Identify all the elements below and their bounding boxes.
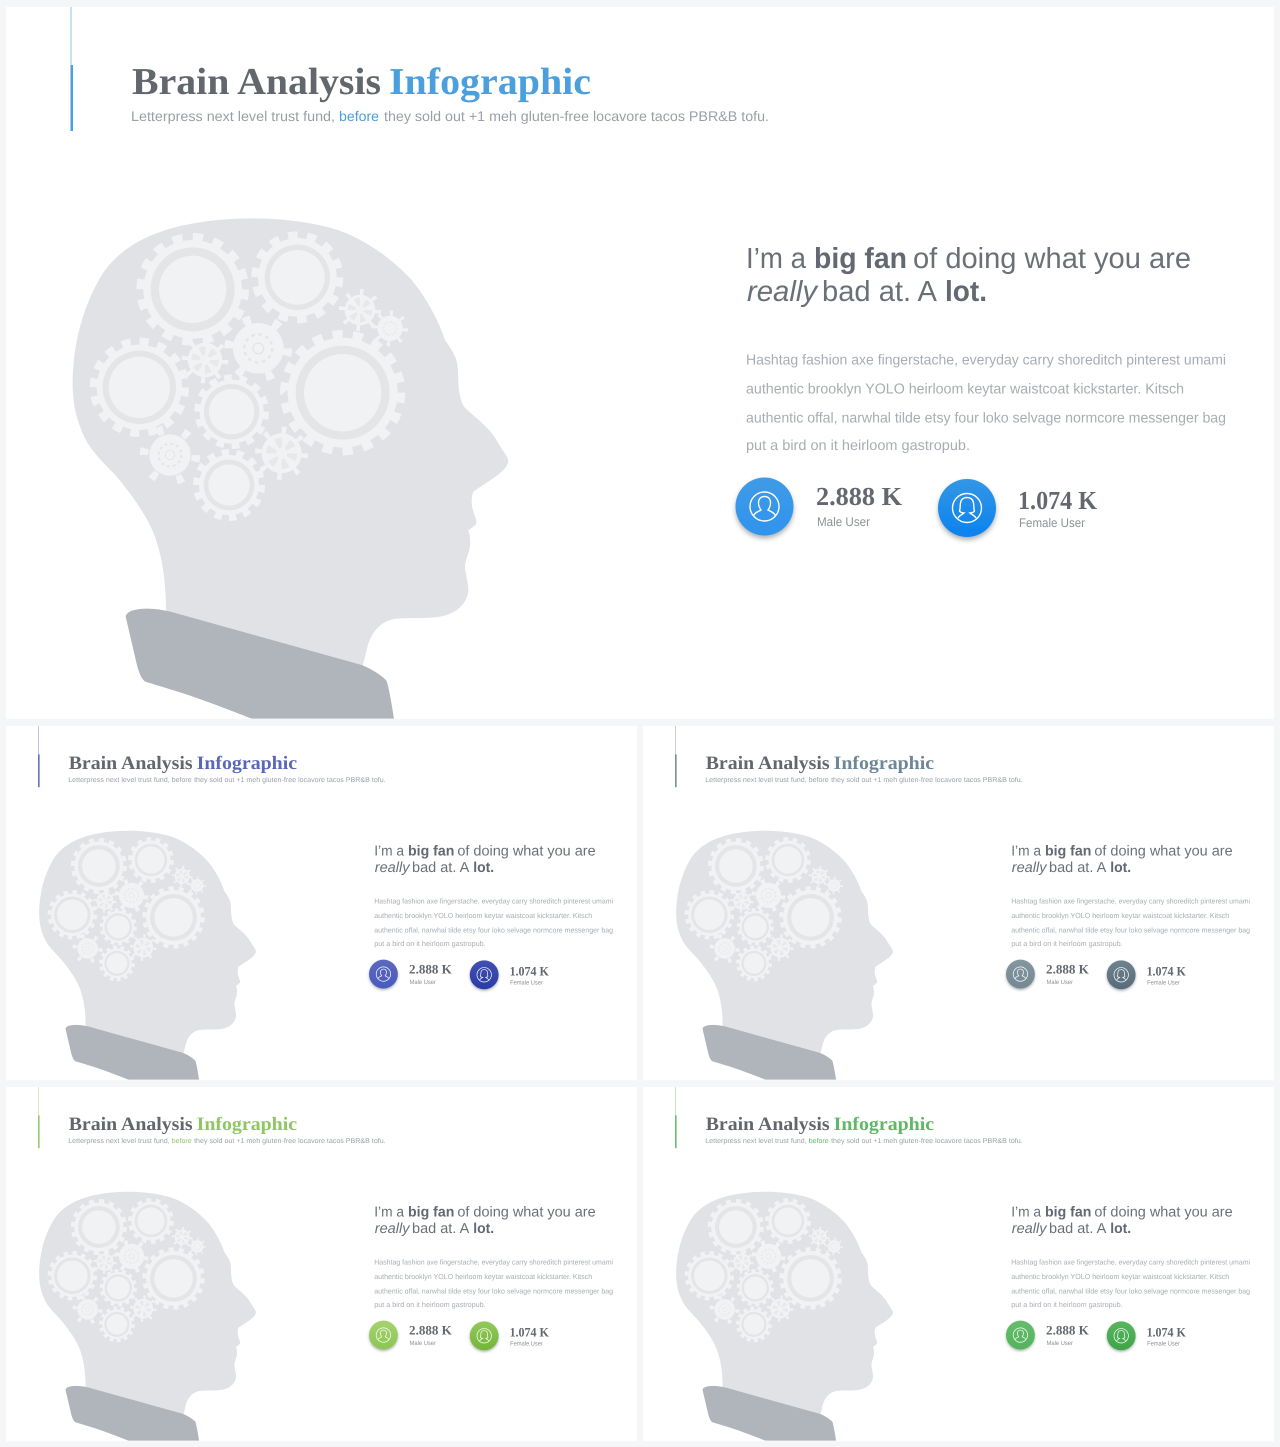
body paragraph: put a bird on it heirloom gastropub. bbox=[1011, 940, 1123, 948]
stat: male user: Male User bbox=[1047, 1339, 1073, 1346]
body paragraph: authentic brooklyn YOLO heirloom keytar waistcoat kickstarter. Kitsch bbox=[1011, 912, 1229, 920]
title bbox=[69, 752, 297, 773]
subtitle: before bbox=[172, 776, 192, 784]
stat: female user: Female User bbox=[1147, 1340, 1180, 1347]
quote heading: big fan bbox=[408, 1204, 454, 1220]
quote heading: big fan bbox=[814, 243, 907, 275]
quote heading: big fan bbox=[1045, 843, 1091, 859]
quote heading: I’m a bbox=[1011, 1204, 1041, 1220]
subtitle bbox=[68, 1137, 386, 1145]
panel: green slide bbox=[643, 1087, 1274, 1441]
title: Infographic bbox=[197, 752, 297, 773]
subtitle: before bbox=[172, 1137, 192, 1145]
quote heading: bad at. A bbox=[1049, 859, 1107, 875]
subtitle: Letterpress next level trust fund, bbox=[705, 776, 807, 784]
body paragraph: authentic brooklyn YOLO heirloom keytar waistcoat kickstarter. Kitsch bbox=[374, 1273, 592, 1281]
subtitle: they sold out +1 meh gluten-free locavore tacos PBR&B tofu. bbox=[194, 1137, 386, 1145]
body paragraph: put a bird on it heirloom gastropub. bbox=[374, 940, 486, 948]
quote heading: bad at. A bbox=[822, 276, 938, 308]
quote heading: lot. bbox=[945, 276, 987, 308]
panel background bbox=[643, 1087, 1274, 1441]
subtitle: before bbox=[339, 108, 379, 124]
panel: slate slide bbox=[643, 726, 1274, 1080]
accent bar bbox=[675, 726, 677, 787]
accent bar bbox=[70, 7, 73, 131]
accent bar bbox=[38, 1087, 40, 1148]
stat: female user: Female User bbox=[1147, 979, 1180, 986]
stat: male user: Male User bbox=[410, 978, 436, 985]
subtitle: they sold out +1 meh gluten-free locavore tacos PBR&B tofu. bbox=[194, 776, 386, 784]
title: Brain Analysis bbox=[69, 752, 193, 773]
body paragraph bbox=[1011, 1258, 1250, 1309]
stat: female user bbox=[1107, 960, 1186, 989]
stat: female user: 1.074 K bbox=[1147, 1325, 1186, 1339]
subtitle bbox=[705, 1137, 1023, 1145]
panel background bbox=[643, 726, 1274, 1080]
stat: female user: 1.074 K bbox=[1018, 486, 1098, 515]
body paragraph: authentic offal, narwhal tilde etsy four loko selvage normcore messenger bag bbox=[374, 1287, 613, 1295]
body paragraph: authentic brooklyn YOLO heirloom keytar waistcoat kickstarter. Kitsch bbox=[374, 912, 592, 920]
body paragraph bbox=[374, 1258, 613, 1309]
body paragraph: put a bird on it heirloom gastropub. bbox=[1011, 1301, 1123, 1309]
body paragraph: Hashtag fashion axe fingerstache, everyday carry shoreditch pinterest umami bbox=[1011, 1258, 1250, 1266]
panel: main blue slide bbox=[6, 7, 1274, 719]
stat: female user: Female User bbox=[510, 1340, 543, 1347]
panel: lime slide bbox=[6, 1087, 637, 1441]
subtitle: before bbox=[809, 1137, 829, 1145]
stat: male user: Male User bbox=[1047, 978, 1073, 985]
stat: male user: 2.888 K bbox=[1046, 1323, 1089, 1337]
body paragraph: Hashtag fashion axe fingerstache, everyday carry shoreditch pinterest umami bbox=[374, 897, 613, 905]
accent bar bbox=[675, 1087, 677, 1148]
stat: male user bbox=[369, 960, 452, 988]
stat: female user: Female User bbox=[510, 979, 543, 986]
quote heading: I’m a bbox=[374, 843, 404, 859]
quote heading: really bbox=[1012, 1220, 1047, 1236]
stat: male user bbox=[1006, 960, 1089, 988]
quote heading: I’m a bbox=[1011, 843, 1041, 859]
quote heading bbox=[746, 243, 1191, 308]
quote heading: bad at. A bbox=[412, 859, 470, 875]
stat: female user: Female User bbox=[1019, 516, 1085, 530]
stat: male user: Male User bbox=[410, 1339, 436, 1346]
subtitle bbox=[68, 776, 386, 784]
quote heading: of doing what you are bbox=[1094, 843, 1233, 859]
quote heading: I’m a bbox=[374, 1204, 404, 1220]
head silhouette with gears bbox=[73, 218, 508, 719]
subtitle bbox=[131, 108, 769, 124]
title: Infographic bbox=[834, 1113, 934, 1134]
subtitle: they sold out +1 meh gluten-free locavore tacos PBR&B tofu. bbox=[831, 1137, 1023, 1145]
stat: female user bbox=[470, 960, 549, 989]
stat: male user bbox=[369, 1321, 452, 1349]
quote heading: really bbox=[1012, 859, 1047, 875]
stat: male user bbox=[736, 478, 903, 536]
title: Infographic bbox=[197, 1113, 297, 1134]
subtitle: they sold out +1 meh gluten-free locavore tacos PBR&B tofu. bbox=[831, 776, 1023, 784]
title bbox=[132, 61, 591, 103]
stat: female user bbox=[470, 1321, 549, 1350]
quote heading: I’m a bbox=[746, 243, 807, 275]
subtitle bbox=[705, 776, 1023, 784]
subtitle: Letterpress next level trust fund, bbox=[131, 108, 335, 124]
body paragraph: authentic offal, narwhal tilde etsy four loko selvage normcore messenger bag bbox=[374, 926, 613, 934]
panel: indigo slide bbox=[6, 726, 637, 1080]
body paragraph bbox=[1011, 897, 1250, 948]
quote heading: really bbox=[375, 859, 410, 875]
body paragraph: put a bird on it heirloom gastropub. bbox=[374, 1301, 486, 1309]
stat: female user bbox=[938, 479, 1098, 537]
title: Infographic bbox=[834, 752, 934, 773]
head silhouette with gears bbox=[676, 831, 893, 1080]
subtitle: Letterpress next level trust fund, bbox=[68, 1137, 170, 1145]
quote heading: bad at. A bbox=[412, 1220, 470, 1236]
panel background bbox=[6, 726, 637, 1080]
quote heading: lot. bbox=[1110, 859, 1131, 875]
stat: female user: 1.074 K bbox=[510, 1325, 549, 1339]
quote heading bbox=[1011, 843, 1233, 875]
stat: male user bbox=[1006, 1321, 1089, 1349]
stat: male user: 2.888 K bbox=[409, 962, 452, 976]
stat: male user: 2.888 K bbox=[816, 482, 903, 511]
head silhouette with gears bbox=[676, 1192, 893, 1441]
head silhouette with gears bbox=[39, 1192, 256, 1441]
body paragraph: Hashtag fashion axe fingerstache, everyday carry shoreditch pinterest umami bbox=[746, 352, 1226, 368]
body paragraph: put a bird on it heirloom gastropub. bbox=[746, 438, 970, 454]
title bbox=[69, 1113, 297, 1134]
title: Brain Analysis bbox=[132, 61, 381, 103]
quote heading: lot. bbox=[473, 859, 494, 875]
quote heading: of doing what you are bbox=[457, 843, 596, 859]
panel background bbox=[6, 1087, 637, 1441]
head silhouette with gears bbox=[39, 831, 256, 1080]
title: Brain Analysis bbox=[69, 1113, 193, 1134]
stat: female user: 1.074 K bbox=[510, 964, 549, 978]
accent bar bbox=[38, 726, 40, 787]
stat: female user bbox=[1107, 1321, 1186, 1350]
quote heading: lot. bbox=[473, 1220, 494, 1236]
quote heading bbox=[374, 843, 596, 875]
panel background bbox=[6, 7, 1274, 719]
subtitle: they sold out +1 meh gluten-free locavore tacos PBR&B tofu. bbox=[384, 108, 769, 124]
quote heading: big fan bbox=[1045, 1204, 1091, 1220]
body paragraph: authentic offal, narwhal tilde etsy four loko selvage normcore messenger bag bbox=[746, 410, 1226, 426]
body paragraph: authentic brooklyn YOLO heirloom keytar waistcoat kickstarter. Kitsch bbox=[746, 382, 1184, 398]
title: Infographic bbox=[389, 61, 591, 103]
title: Brain Analysis bbox=[706, 752, 830, 773]
quote heading: really bbox=[375, 1220, 410, 1236]
quote heading: of doing what you are bbox=[1094, 1204, 1233, 1220]
body paragraph: Hashtag fashion axe fingerstache, everyday carry shoreditch pinterest umami bbox=[374, 1258, 613, 1266]
subtitle: Letterpress next level trust fund, bbox=[68, 776, 170, 784]
body paragraph bbox=[746, 352, 1226, 454]
quote heading: of doing what you are bbox=[913, 243, 1191, 275]
quote heading: lot. bbox=[1110, 1220, 1131, 1236]
subtitle: Letterpress next level trust fund, bbox=[705, 1137, 807, 1145]
quote heading bbox=[1011, 1204, 1233, 1236]
stat: male user: 2.888 K bbox=[1046, 962, 1089, 976]
body paragraph: authentic offal, narwhal tilde etsy four loko selvage normcore messenger bag bbox=[1011, 926, 1250, 934]
body paragraph bbox=[374, 897, 613, 948]
body paragraph: Hashtag fashion axe fingerstache, everyday carry shoreditch pinterest umami bbox=[1011, 897, 1250, 905]
title bbox=[706, 752, 934, 773]
body paragraph: authentic brooklyn YOLO heirloom keytar waistcoat kickstarter. Kitsch bbox=[1011, 1273, 1229, 1281]
quote heading: bad at. A bbox=[1049, 1220, 1107, 1236]
subtitle: before bbox=[809, 776, 829, 784]
stat: male user: Male User bbox=[817, 515, 870, 529]
quote heading: of doing what you are bbox=[457, 1204, 596, 1220]
title: Brain Analysis bbox=[706, 1113, 830, 1134]
title bbox=[706, 1113, 934, 1134]
stat: female user: 1.074 K bbox=[1147, 964, 1186, 978]
quote heading bbox=[374, 1204, 596, 1236]
stat: male user: 2.888 K bbox=[409, 1323, 452, 1337]
body paragraph: authentic offal, narwhal tilde etsy four loko selvage normcore messenger bag bbox=[1011, 1287, 1250, 1295]
quote heading: really bbox=[747, 276, 819, 308]
quote heading: big fan bbox=[408, 843, 454, 859]
